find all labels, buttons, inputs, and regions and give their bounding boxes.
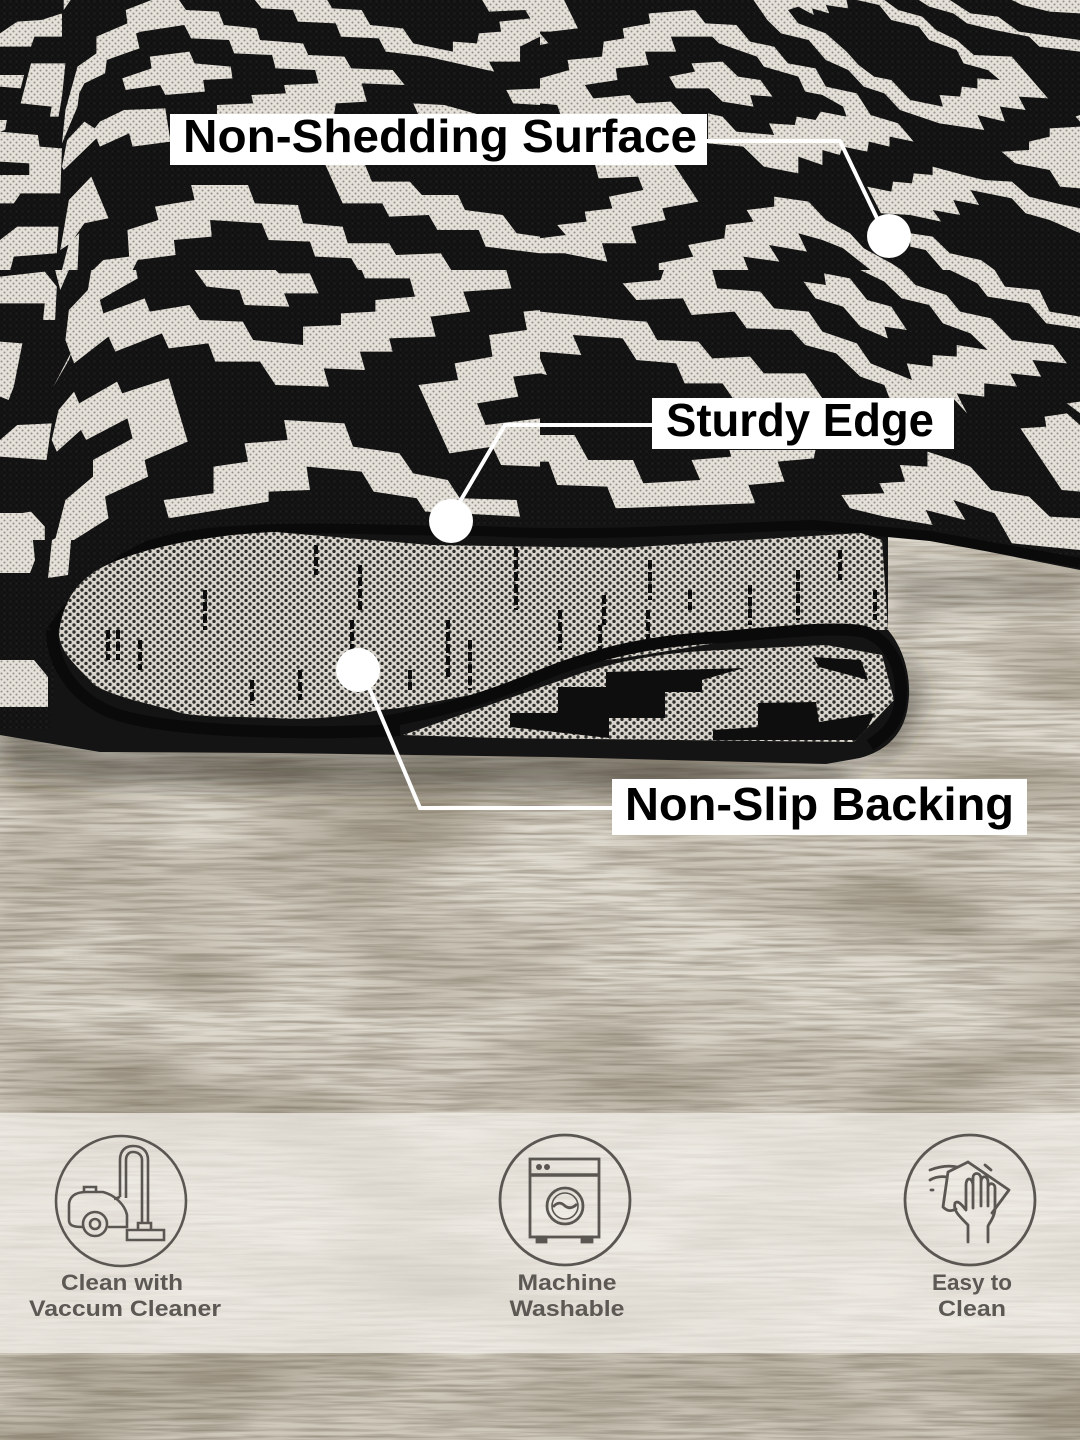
care item: machine washable (500, 1135, 630, 1321)
callout: non-shedding surface (170, 110, 911, 258)
label: Easy to (932, 1270, 1012, 1295)
label: Clean (938, 1296, 1006, 1321)
icon: washing machine (500, 1135, 630, 1265)
label: Clean with (61, 1270, 183, 1295)
care instructions band (0, 1113, 1080, 1353)
callout: sturdy edge (429, 394, 954, 543)
label (510, 1270, 624, 1321)
curled front flap showing pattern (52, 629, 901, 750)
label: Sturdy Edge (666, 394, 934, 446)
care item: vacuum cleaner (29, 1136, 221, 1321)
label: Washable (510, 1296, 624, 1321)
callout: non-slip backing (336, 648, 1027, 835)
label: Non-Slip Backing (625, 778, 1014, 830)
label: Vaccum Cleaner (29, 1296, 221, 1321)
label (29, 1270, 221, 1321)
label: Non-Shedding Surface (183, 110, 697, 162)
icon: vacuum cleaner (56, 1136, 186, 1266)
rug bound edge (52, 525, 1080, 630)
icon: hand wiping with cloth (905, 1135, 1035, 1265)
non-slip backing (59, 532, 888, 719)
leader line and dot (429, 425, 652, 543)
care item: easy to clean (905, 1135, 1035, 1321)
leader line and dot (707, 141, 911, 258)
rug black body (0, 0, 1080, 764)
rug folded corner (0, 0, 1080, 764)
label: Machine (518, 1270, 616, 1295)
rug shadow (0, 565, 1080, 790)
leader line and dot (336, 648, 612, 808)
label (932, 1270, 1012, 1321)
rug diamond pattern (0, 0, 1080, 740)
